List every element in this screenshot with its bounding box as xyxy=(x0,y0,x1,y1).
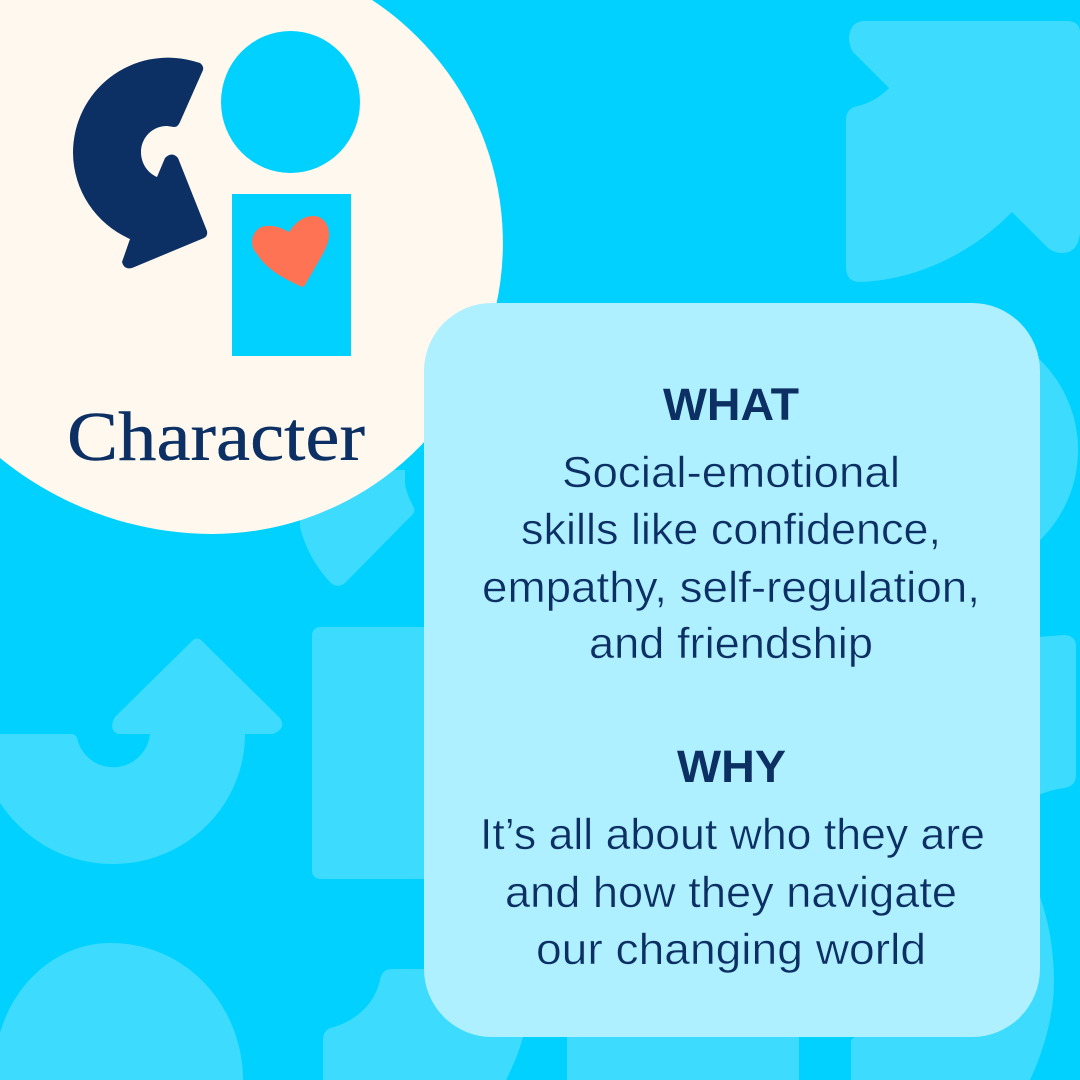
shape: bottom left dome xyxy=(0,943,243,1080)
shape: arrow behind cream circle xyxy=(300,470,414,586)
shape: right small rectangle xyxy=(1000,635,1076,815)
title: Character: Character xyxy=(67,399,365,476)
text block: what description: Social-emotional xyxy=(562,448,900,497)
heading: WHY: WHY xyxy=(677,741,786,792)
shape: top right arrow xyxy=(846,21,1080,282)
text block: what description: and friendship xyxy=(589,619,873,668)
text block: what description: empathy, self-regulation, xyxy=(482,563,980,612)
text block: what description xyxy=(482,448,980,668)
shape: center rectangle xyxy=(312,627,512,879)
shape: bottom center notched shape xyxy=(323,969,523,1080)
shape: bottom middle rectangle xyxy=(567,1000,799,1080)
heading: WHAT: WHAT xyxy=(663,379,799,430)
icon: blue rectangle body xyxy=(232,194,351,356)
panel: cream corner shape xyxy=(0,0,503,534)
text block: why description: our changing world xyxy=(536,925,926,974)
logo icon group xyxy=(73,31,360,356)
icon: navy curved arrow xyxy=(73,58,207,268)
shape: bottom right curved shape xyxy=(851,880,1054,1080)
panel: what and why card xyxy=(424,303,1040,1037)
shape: bottom left arrow xyxy=(0,638,282,864)
shape: middle right circle xyxy=(826,324,1078,576)
text block: why description: and how they navigate xyxy=(505,868,957,917)
text block: why description: It’s all about who they are xyxy=(480,810,985,859)
icon: coral heart xyxy=(252,216,329,287)
text block: what description: skills like confidence, xyxy=(521,505,941,554)
text block: why description xyxy=(480,810,985,974)
icon: blue circle head xyxy=(221,31,360,173)
